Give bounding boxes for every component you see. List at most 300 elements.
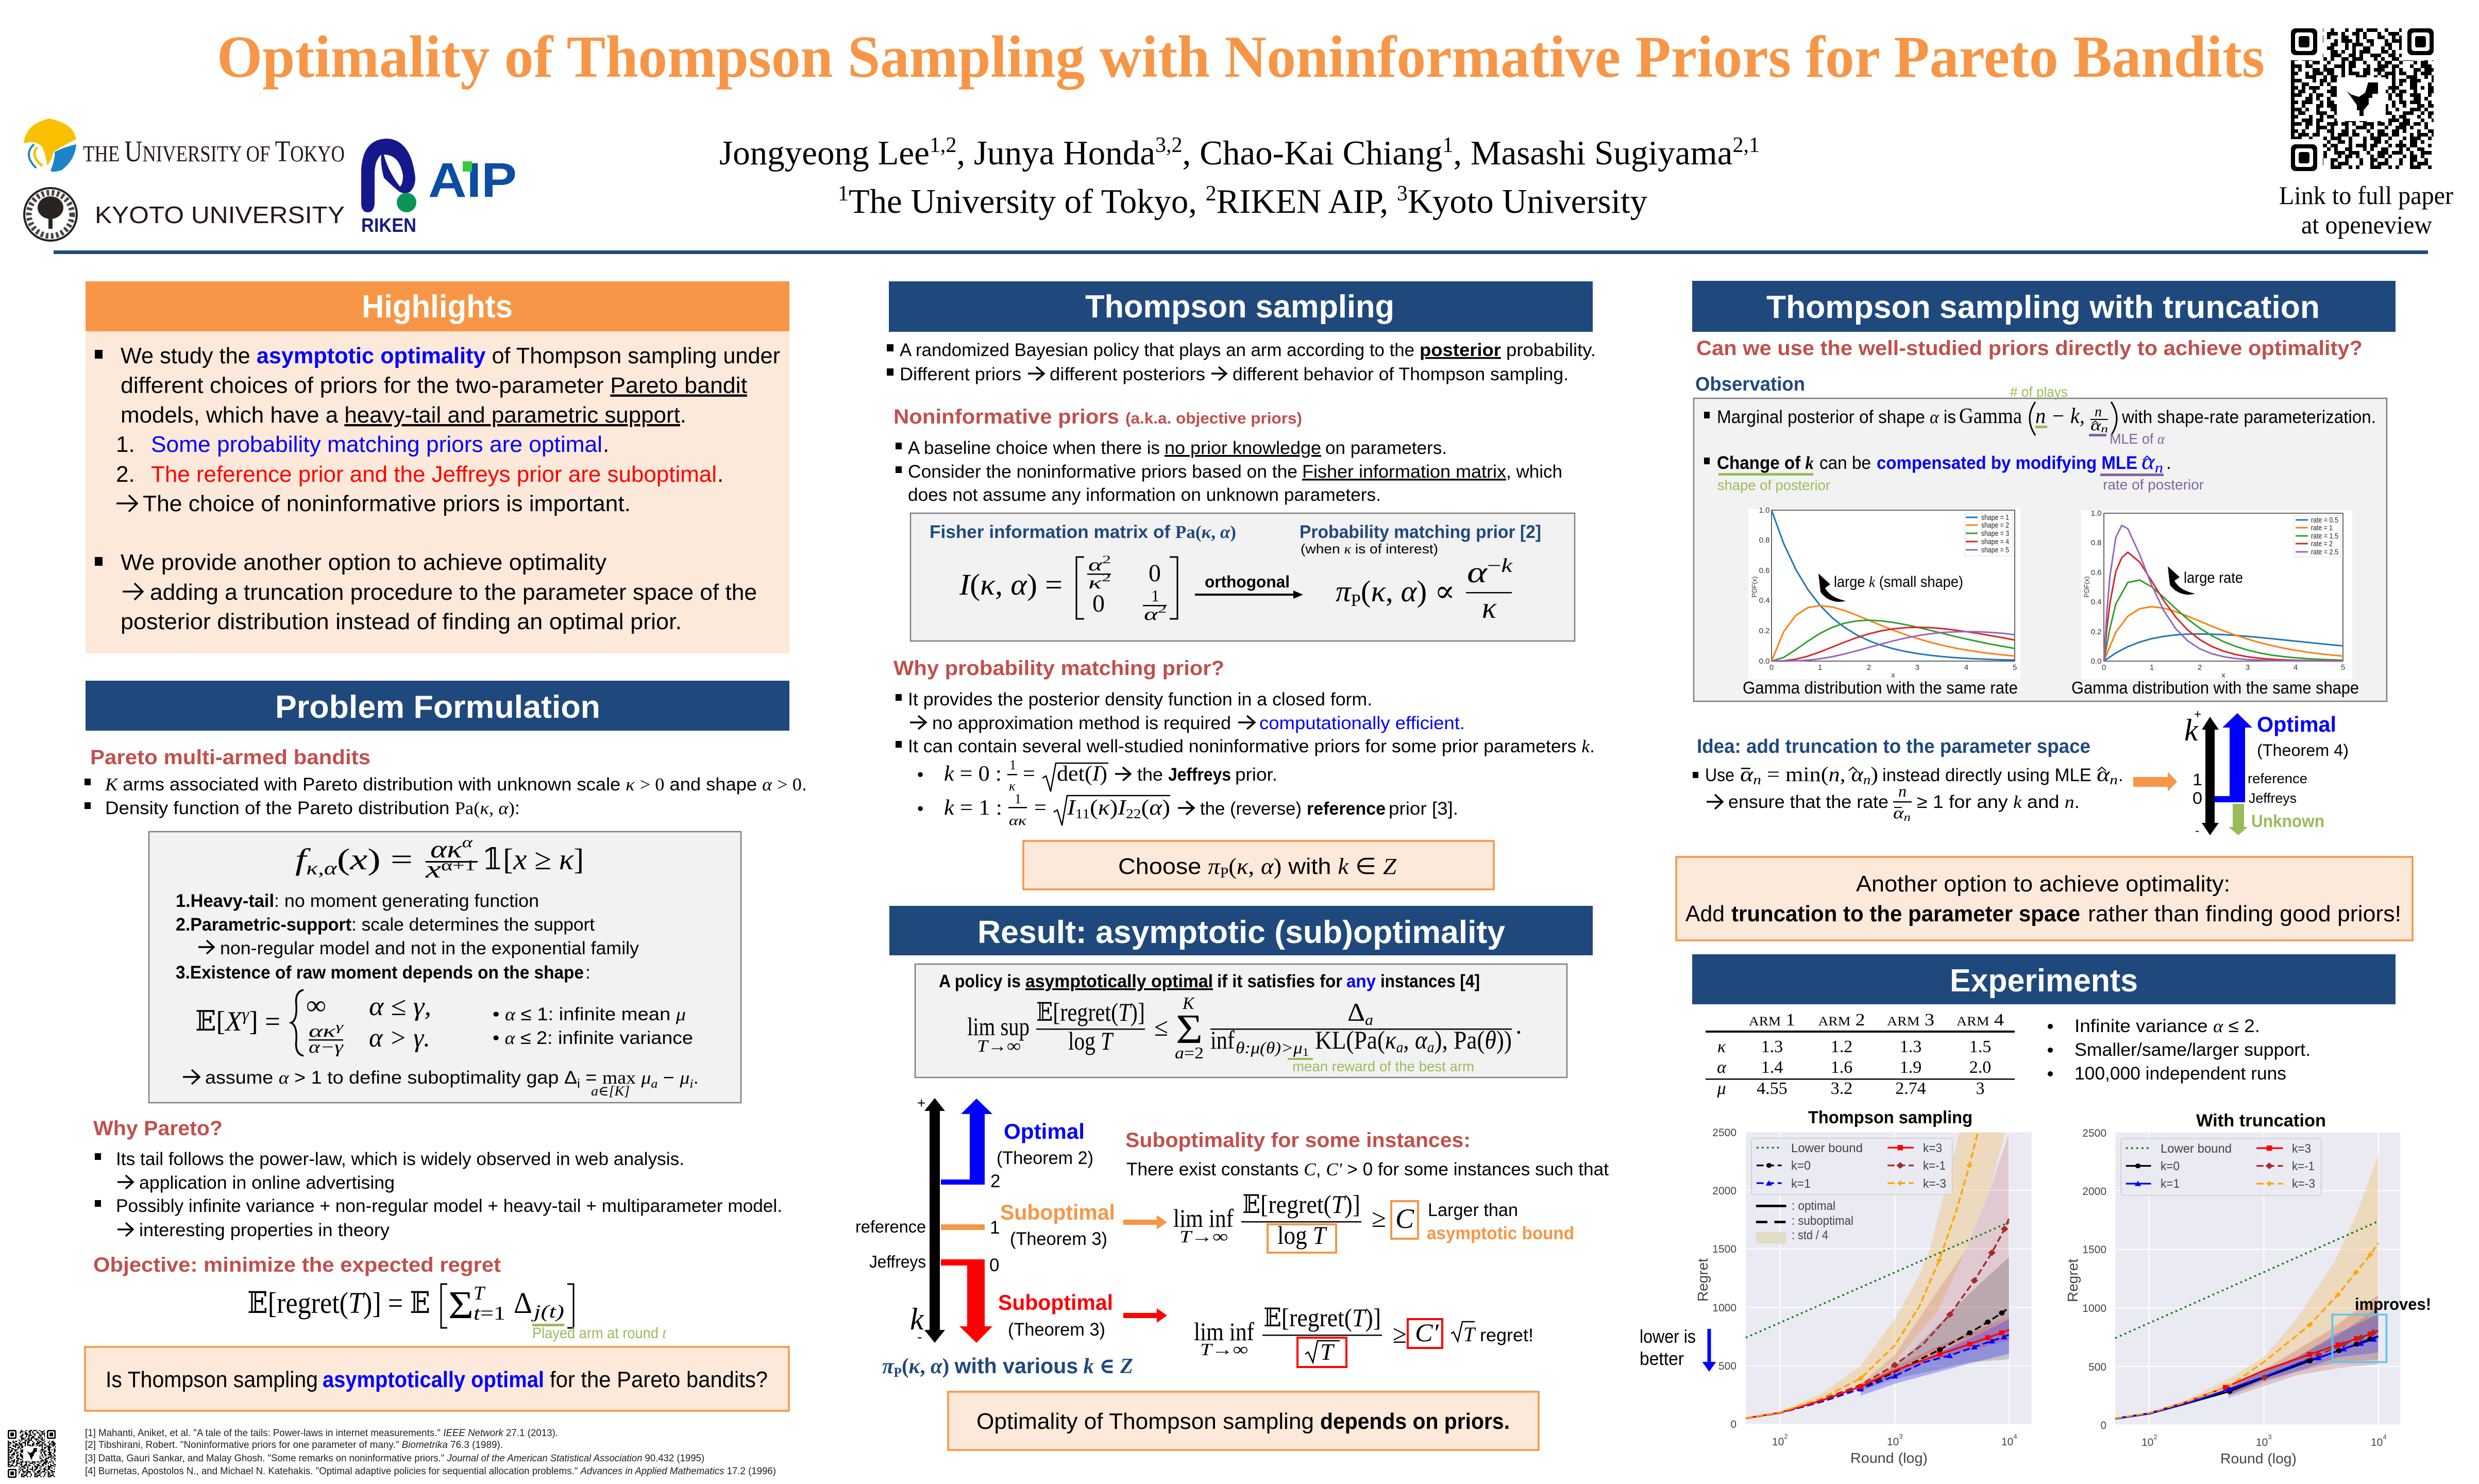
legend: rate: rate = 2.5 [2311,548,2338,556]
formula: Pareto density: x) = [350,842,402,876]
text block: why Pareto bullets [95,1149,782,1240]
table: arm parameters: 4.55 [1757,1079,1787,1098]
formula: Pareto density: α [462,834,474,851]
legend labels: k=3 [1923,1141,1942,1155]
text block: idea explanation: n [1898,782,1907,800]
QR code [2291,28,2434,171]
text block: reference prior case: prior [3]. [1389,799,1458,819]
arrow: optimal [941,1099,992,1185]
text block: noninformative bullets: , which [1506,462,1562,482]
header [24,24,2453,254]
text: definition sentence: instances [4] [1380,971,1480,991]
diagram: prior parameter k axis [855,1095,1133,1380]
axis labels: 2 [2153,1433,2157,1441]
heading: truncation: Thompson sampling with truncation [1766,290,2320,325]
text: larger than asymptotic bound: asymptotic bound [1427,1223,1574,1243]
axis labels: 3 [1899,1432,1903,1440]
formula: expected regret: t=1 [474,1303,505,1324]
logo: RIKEN [361,139,416,237]
diagram: truncation k axis [2184,707,2349,838]
axis labels: Regret [1695,1258,1711,1302]
text block: suboptimality gap: = [580,1068,602,1088]
axis labels: 0.2 [2091,628,2101,636]
axis labels: PDF(x) [2083,576,2090,598]
axis labels: 1000 [1712,1302,1736,1314]
table: arm parameters: κ [1717,1037,1726,1056]
arrow: large k [1818,574,1846,602]
formula: probability matching prior: P [1351,591,1361,610]
text block: idea explanation: instead directly using MLE [1882,765,2092,785]
text block: idea explanation: = min( n, α [1767,763,1862,786]
text block: experiment settings: Infinite variance α ≤ 2. [2075,1016,2260,1036]
label: reference suboptimal: (Theorem 3) [1010,1229,1107,1249]
axis labels: 0 [1769,663,1774,672]
label: Jeffreys suboptimal: (Theorem 3) [1008,1320,1105,1340]
text: change of k: . [2166,453,2171,473]
text block: Thompson sampling intro [887,340,1596,384]
affiliations: The University of Tokyo, [849,182,1206,221]
text block: reference prior case: I [1067,796,1076,820]
legend: shape [1965,513,2012,556]
table: arm parameters: 1.6 [1831,1058,1852,1077]
formula: Fisher matrix: κ [1088,574,1097,593]
label: axis signs [917,1095,925,1345]
text block: suboptimality gap [183,1068,699,1099]
legend labels: k=1 [2161,1177,2180,1191]
text: regret: regret! [1480,1325,1533,1345]
label: optimal theorem 4: reference [2248,771,2307,786]
formula: log T lower bound [1173,1190,1418,1253]
formula: log T lower bound: C [1395,1203,1414,1234]
legend labels: : optimal [1792,1199,1835,1213]
formula: raw moment cases: ακ [309,1022,326,1041]
formula: sqrt T lower bound: T [1320,1339,1335,1365]
heading: Experiments: Experiments [1950,963,2138,999]
arrow: optimal blue [2215,713,2252,802]
axis labels: 4 [1964,663,1968,672]
text block: highlights body: posterior distribution instead of finding an optimal prior. [121,609,682,634]
formula: raw moment cases: ] = [249,1006,280,1037]
axis labels: 0.0 [1759,657,1769,666]
table: arm parameters: ARM 2 [1818,1010,1865,1030]
text block: noninformative bullets [896,438,1562,505]
text block: suboptimality gap: i [689,1077,693,1091]
text: change of k: compensated by modifying MLE [1877,453,2137,473]
subheading: why probability matching prior: Why probability matching prior? [893,657,1224,680]
subheading: Why Pareto: Why Pareto? [93,1117,223,1140]
formula: Fisher matrix: α [1088,555,1098,575]
label: optimal theorem 4: (Theorem 4) [2257,741,2349,760]
legend labels: Lower bound [2161,1142,2232,1156]
axis labels: 0.6 [1759,566,1769,575]
text block: suboptimality heading: There exist constants C, C′ > 0 for some instances such that [1126,1159,1609,1179]
text block: highlights body: We provide another option to achieve optimality [121,550,606,575]
text: marginal posterior: n [2095,404,2102,420]
formula: probability matching prior: κ, α) ∝ [1371,575,1455,608]
subheading: question: Can we use the well-studied priors directly to achieve optimality? [1696,337,2363,360]
label: optimal: (Theorem 2) [997,1148,1093,1168]
formula: asymptotic bound: T→∞ [977,1037,1021,1056]
heading: Result [889,906,1593,955]
text block: suboptimality gap: max μ [602,1068,650,1088]
subheading: objective: Objective: minimize the expected regret [93,1254,501,1276]
axis labels: 0.4 [2091,598,2101,606]
text block: highlights body: models, which have a heavy-tail and parametric support. [121,402,686,428]
formula: probability matching prior [1336,555,1513,625]
logo: University of Tokyo [24,119,345,172]
chart: Thompson sampling regret [1640,1108,2031,1466]
formula: Fisher matrix: 2 [1102,553,1111,566]
text block: highlights body: The reference prior and the Jeffreys prior are suboptimal [151,462,717,487]
legend labels: k=0 [2161,1159,2180,1173]
text block: Pareto properties: : no moment generating function [274,891,539,911]
formula: asymptotic bound: Δ [1347,998,1364,1026]
text block: suboptimality heading: Suboptimality for some instances: [1125,1129,1471,1152]
text block: Jeffreys prior case: the [1137,765,1163,785]
text block: Pareto properties: 2.Parametric-support [176,915,351,935]
text block: why Pareto bullets: interesting properties in theory [139,1220,390,1240]
QR caption: Link to full paper [2279,181,2453,210]
text block: why probability matching bullets: It can contain several well-studied noninformative priors for some prior parameters k. [908,736,1595,756]
caption: various k: κ, α) with various k ∈ Z [909,1354,1134,1378]
text block: reference prior case: k = 1 : [944,796,1002,820]
text block: idea explanation: n [1753,772,1761,787]
formula: asymptotic bound: ), Pa( [1434,1025,1485,1054]
panel: observation box [1694,384,2387,701]
axis labels: 10 [2371,1437,2383,1448]
text block: Jeffreys prior case [917,757,1277,794]
panel: experiments [1640,954,2431,1466]
formula: probability matching prior: ( [1361,575,1371,608]
text block: idea explanation: ) [1870,763,1878,786]
formula: raw moment cases: 𝔼[X [195,1006,242,1037]
formula: Pareto density: α+1 [441,857,476,874]
label: axis signs: - [917,1329,922,1345]
logo: Kyoto University [24,188,345,241]
legend: rate [2294,516,2341,557]
formula: Pareto density: κ,α [306,858,338,879]
label: optimal theorem 4: Jeffreys [2249,790,2297,806]
axis labels: 5 [2341,663,2345,672]
label: reference suboptimal [855,1200,1115,1249]
text block: bandit definition: K arms associated with Pareto distribution with unknown scale κ > 0 and shape α > 0. [105,774,807,795]
title: Optimality of Thompson Sampling with Noninformative Priors for Pareto Bandits [217,24,2265,90]
text block: moment conditions: • α ≤ 2: infinite variance [493,1028,693,1048]
axis labels: 3 [2268,1433,2272,1441]
text block: idea explanation: ≥ 1 for any k and n. [1917,792,2080,812]
text block: Thompson sampling intro: Different priors [900,364,1021,384]
label: axis marks [2184,707,2202,838]
legend: rate: rate = 1 [2311,524,2333,532]
text: marginal posterior: with shape-rate parameterization. [2121,407,2376,427]
formula: asymptotic bound: , [1403,1025,1415,1054]
formula: log T lower bound: T→∞ [1179,1227,1228,1246]
axis labels: 0 [1730,1419,1736,1430]
axis labels: 0.2 [1759,627,1769,635]
formula: asymptotic bound: K [1182,994,1195,1013]
logo: AIP: AIP [428,153,517,208]
text block: Thompson sampling intro: different posteriors [1050,364,1205,384]
table: arm parameters: 3.2 [1831,1079,1852,1098]
formula: raw moment cases: α ≤ γ, [369,992,431,1021]
text block: Pareto properties: 1.Heavy-tail [176,891,274,911]
formula: raw moment cases: α > γ. [369,1023,430,1053]
callout: another option [1676,857,2413,940]
table: arm parameters: ARM 4 [1957,1010,2004,1030]
text block: Pareto properties: 3.Existence of raw moment depends on the shape [176,963,584,983]
arrow: orange to truncation diagram [2133,772,2177,791]
callout: choose prior: ( [1228,854,1237,879]
text block: why Pareto bullets: application in online advertising [139,1173,395,1193]
axis labels: 2500 [1712,1127,1736,1139]
caption: various k: P [893,1365,902,1380]
axis labels: 1500 [1712,1243,1736,1255]
callout: research question: asymptotically optimal [323,1367,544,1392]
legend labels: : suboptimal [1792,1214,1853,1228]
formula: expected regret: Δ [514,1286,532,1320]
label: Jeffreys suboptimal: 0 [989,1255,999,1275]
text block: moment conditions [493,1004,693,1048]
axis labels: 1 [2150,663,2154,672]
authors: , Junya Honda [956,134,1155,172]
authors: 3,2 [1155,133,1183,157]
callout: another option: truncation to the parameter space [1731,901,2080,926]
axis labels: 2 [2198,663,2202,672]
axis labels: 1 [1818,663,1822,672]
references [85,1428,776,1477]
text block: bandit definition [85,774,807,818]
arrow: k axis [2202,717,2219,835]
logo: Kyoto University: KYOTO UNIVERSITY [95,201,345,228]
text block: experiment settings [2048,1016,2311,1084]
formula: sqrt T lower bound: ≥ [1393,1320,1407,1348]
table: arm parameters: ARM 3 [1887,1010,1934,1030]
annotation: mean reward: mean reward of the best arm [1292,1058,1474,1074]
text block: noninformative bullets: Consider the noninformative priors based on the [908,462,1297,482]
text: definition sentence: asymptotically optimal [1025,971,1213,991]
text block: noninformative bullets: no prior knowledge [1165,438,1321,458]
text block: suboptimality gap: assume α > 1 to define suboptimality gap Δ [205,1068,556,1088]
text: definition sentence: any [1346,971,1376,991]
small QR code [8,1430,56,1478]
text block: reference prior case: ακ [1009,813,1027,828]
text block: why probability matching bullets: computationally efficient. [1259,713,1465,733]
formula: Pareto density: ακ [430,836,455,863]
formula: expected regret: T [474,1283,486,1304]
heading: truncation [1692,281,2396,332]
label: Fisher information matrix: Fisher information matrix of Pa(κ, α) [930,522,1236,542]
axis labels: 2 [1867,663,1871,672]
label: unknown: Unknown [2251,812,2324,831]
text block: highlights body: . [717,462,723,487]
axis labels: 2500 [2082,1127,2106,1139]
formula: expected regret [247,1283,574,1328]
callout: research question: Is Thompson sampling [106,1367,318,1392]
legend labels: k=0 [1791,1159,1811,1173]
text: change of k: α [2141,450,2153,474]
references: [3] Datta, Gauri Sankar, and Malay Ghosh. "Some remarks on noninformative priors." Journal of the American Statistical Association 90.432 (1995) [85,1453,704,1464]
subheading: idea: Idea: add truncation to the parameter space [1697,736,2090,757]
axis labels: 5 [2013,663,2017,672]
affiliations: RIKEN AIP, [1217,182,1397,221]
axis labels: 10 [2001,1436,2013,1448]
text block: why Pareto bullets: Possibly infinite variance + non-regular model + heavy-tail + multiparameter model. [116,1196,782,1216]
text block: reference prior case: 22 [1126,806,1141,821]
table: arm parameters: α [1717,1058,1727,1077]
subheading: noninformative priors [893,406,1302,428]
formula: probability matching prior: π [1336,575,1352,608]
subheading: observation: Observation [1695,374,1805,395]
panel: Pareto properties box [149,832,741,1103]
label: large rate: large rate [2184,569,2243,586]
table: arm parameters: 1.2 [1831,1037,1852,1056]
heading: Thompson sampling: Thompson sampling [1085,289,1394,325]
annotation: MLE of alpha: MLE of α [2110,431,2165,447]
text block: Thompson sampling intro: posterior [1420,340,1501,360]
axis labels: 500 [1718,1360,1736,1372]
formula: sqrt T lower bound: lim inf [1194,1317,1254,1346]
formula: sqrt T lower bound: 𝔼[regret(T)] [1263,1303,1381,1332]
text block: Jeffreys prior case: = [1023,762,1035,786]
plot area [2115,1133,2400,1424]
label: axis marks: 1 [2193,770,2202,789]
axis labels: 1.0 [2091,509,2101,518]
subheading: Pareto multi-armed bandits: Pareto multi-armed bandits [90,746,370,769]
text: larger than asymptotic bound [1427,1200,1574,1243]
label: Jeffreys suboptimal: Suboptimal [998,1290,1113,1314]
label: large k: large k (small shape) [1834,574,1963,591]
QR caption: at openeview [2301,210,2432,239]
text block: noninformative bullets: A baseline choice when there is [908,438,1160,458]
axis labels: 3 [1915,663,1919,672]
text block: reference prior case: 1 [1015,791,1021,806]
formula: asymptotic bound: inf [1210,1025,1235,1054]
axis labels: 500 [2088,1361,2106,1373]
axis labels [2065,1127,2387,1466]
formula: asymptotic bound: Σ [1176,1007,1203,1052]
axis labels: PDF(x) [1750,576,1758,598]
logo: RIKEN: RIKEN [361,215,416,237]
axis labels: 10 [2256,1437,2268,1448]
formula: Pareto density: x [426,856,436,883]
text block: why probability matching bullets: no approximation method is required [932,713,1231,733]
chart title: With truncation [2196,1111,2326,1131]
text block: why probability matching bullets [896,689,1595,756]
axis labels: 0 [2102,663,2106,672]
legend labels: k=-3 [2292,1177,2315,1191]
heading: Result: Result: asymptotic (sub)optimality [977,915,1506,950]
legend: shape: shape = 5 [1981,546,2009,554]
text block: moment conditions: • α ≤ 1: infinite mean μ [493,1004,686,1024]
QR caption [2279,181,2453,239]
text: change of k [1704,450,2171,476]
formula: asymptotic bound: θ)) [1485,1025,1513,1054]
caption: various k: π [882,1355,894,1378]
axis labels: 0 [2100,1420,2106,1431]
text block: reference prior case [917,791,1458,828]
axis labels: 10 [1887,1436,1899,1448]
text block: reference prior case: κ)I [1098,796,1125,820]
axis labels: 10 [2141,1437,2153,1448]
formula: log T lower bound: 𝔼[regret(T)] [1242,1190,1360,1219]
annotation: rate of posterior: rate of posterior [2103,477,2204,493]
axis labels [1695,1127,2017,1466]
formula: asymptotic bound: a=2 [1175,1043,1204,1062]
legend: shape: shape = 1 [1981,513,2009,522]
axis labels: 3 [2246,663,2250,672]
label: k: k [910,1302,924,1336]
caption: same shape: Gamma distribution with the same shape [2071,678,2359,697]
formula: Pareto density: 𝟙[x ≥ κ] [482,842,584,876]
table: arm parameters: 1.5 [1969,1037,1991,1056]
callout: choose prior: κ, α) with k ∈ Z [1237,854,1395,879]
axis labels: 0.0 [2091,657,2101,666]
text block: Thompson sampling intro: different behavior of Thompson sampling. [1233,364,1569,384]
chart title: Thompson sampling [1808,1108,1972,1127]
arrow: large rate [2168,566,2195,595]
table: arm parameters: μ [1716,1079,1726,1098]
label: axis marks: - [2195,824,2199,838]
callout: choose prior [1023,841,1494,889]
text block: reference prior case: 11 [1075,806,1090,821]
table: arm parameters: 1.4 [1761,1058,1783,1077]
text block: Jeffreys prior case: • [917,765,923,785]
text block: idea explanation [1693,763,2123,823]
axis labels: 4 [2383,1433,2387,1441]
text block: idea explanation: n [1904,811,1911,823]
text: definition sentence: A policy is [939,971,1021,991]
text block: suboptimality gap: i [577,1077,580,1091]
formula: expected regret: 𝔼[regret(T)] = 𝔼 [247,1286,430,1320]
subheading: noninformative priors: Noninformative priors [893,406,1119,428]
label: axis signs: + [917,1095,925,1111]
label: reference suboptimal: reference [855,1217,926,1236]
text block: noninformative bullets: Fisher information matrix [1302,462,1507,482]
arrow: unknown green [2229,804,2248,835]
callout: depends on priors: depends on priors. [1320,1409,1510,1434]
formula: raw moment cases: γ [335,1020,344,1034]
formula: probability matching prior: α [1467,555,1482,589]
formula: asymptotic bound: KL(Pa(κ [1315,1025,1397,1054]
text block: highlights body [95,343,780,634]
legend labels: : std / 4 [1792,1228,1828,1242]
formula: asymptotic bound: a [1396,1039,1403,1056]
text block: highlights body: 2. [116,462,135,487]
legend labels [1791,1141,1946,1242]
panel: asymptotic optimality definition [915,964,1567,1077]
text block: suboptimality gap: a∈[K] [591,1084,630,1099]
annotation: shape of posterior: shape of posterior [1717,477,1830,493]
text block: Thompson sampling intro: A randomized Bayesian policy that plays an arm according to the [900,340,1414,360]
text block: reference prior case: α) [1149,796,1169,820]
legend labels: Lower bound [1791,1141,1863,1155]
heading: Experiments [1692,954,2396,1004]
text: change of k: Change of k [1717,453,1814,473]
plot area [1746,1132,2031,1424]
axis labels: 4 [2013,1432,2017,1440]
formula: Pareto density: f [295,842,303,876]
text block: Pareto properties: non-regular model and not in the exponential family [220,938,639,958]
formula: Pareto density [295,834,584,883]
text block: Pareto properties [176,891,639,983]
text: change of k: can be [1819,453,1871,473]
text block: reference prior case: the (reverse) [1200,799,1302,819]
text block: idea explanation: n [1863,772,1870,787]
axis labels: Round (log) [1850,1450,1928,1466]
panel: highlights [86,281,789,653]
axis labels: 0.8 [2091,538,2101,547]
callout: choose prior: Choose π [1118,854,1219,879]
